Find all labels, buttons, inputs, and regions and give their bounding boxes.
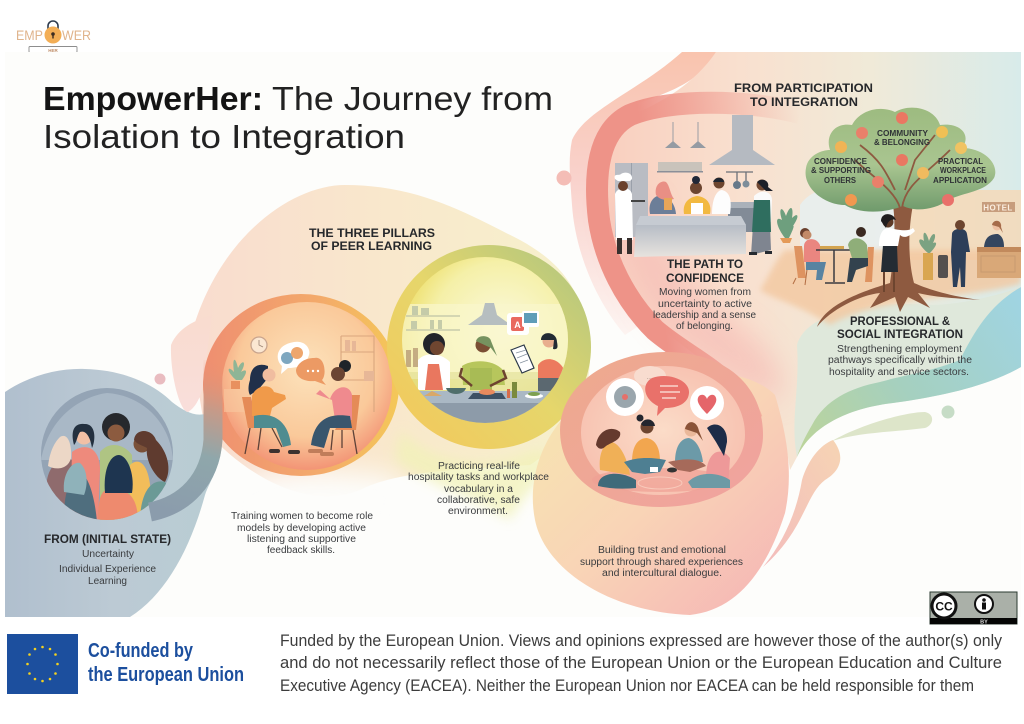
seated woman 3 — [675, 438, 703, 462]
co-funded label — [88, 640, 244, 686]
text: practicing hospitality tasks: collaborative, safe — [437, 495, 520, 506]
plant — [777, 208, 797, 238]
funding disclaimer: and do not necessarily reflect those of the European Union or the European Education and Culture — [280, 654, 1002, 672]
ribbon: grey-blue ribbon joining first circle — [150, 360, 213, 512]
text: building trust: and intercultural dialogue. — [602, 568, 722, 579]
chef — [615, 188, 633, 240]
infographic panel background — [5, 52, 1021, 617]
text: training role models: models by developing active — [237, 523, 366, 534]
heading: three pillars — [309, 226, 435, 253]
counter — [634, 216, 746, 257]
hotel lobby: HOTEL — [983, 204, 1013, 212]
counter items — [446, 388, 466, 394]
text: practicing hospitality tasks: environment. — [448, 506, 508, 517]
woman with tablet — [538, 359, 565, 390]
tree labels: & SUPPORTING — [811, 166, 871, 175]
text: the path to confidence: CONFIDENCE — [666, 271, 744, 285]
seated woman 2 — [632, 438, 660, 462]
heading: from participation to integration: TO INTEGRATION — [750, 95, 858, 109]
cook at stove — [712, 190, 731, 214]
logo: EmpowerHer — [16, 21, 91, 53]
woman by tree — [881, 245, 898, 272]
hotel lobby — [760, 190, 1021, 325]
text: professional and social integration: hospitality and service sectors. — [829, 367, 969, 378]
funding disclaimer: Executive Agency (EACEA). Neither the European Union nor EACEA can be held responsible for them — [280, 677, 974, 695]
pillar 2: yellow-green ring and kitchen scene — [387, 245, 591, 449]
co-funded label: Co-funded by — [88, 640, 194, 662]
swoosh: pale green blob — [832, 412, 932, 441]
text: practicing hospitality tasks: vocabulary in a — [444, 484, 513, 495]
pale pink drip — [171, 321, 203, 412]
pillar 2: yellow-green ring and kitchen scene: A — [514, 320, 521, 330]
pillar 3: pink ring and discussion circle — [560, 352, 763, 507]
window behind tree — [800, 185, 905, 250]
panel: lower pink blob — [533, 371, 789, 615]
heading: from initial state: Learning — [88, 576, 127, 587]
text: the path to confidence: leadership and a sense — [653, 310, 756, 321]
cook middle — [462, 361, 505, 385]
text: the path to confidence: THE PATH TO — [667, 257, 743, 271]
person left — [242, 397, 254, 428]
heading: from initial state: FROM (INITIAL STATE) — [44, 532, 171, 546]
heading: three pillars: THE THREE PILLARS — [309, 226, 435, 240]
text: professional and social integration — [828, 314, 972, 378]
panel: peach wave behind pillars — [190, 185, 590, 496]
text: training role models — [231, 511, 373, 556]
tree labels: COMMUNITY — [877, 129, 929, 138]
funding disclaimer: Funded by the European Union. Views and opinions expressed are however those of the author(s) only — [280, 632, 1003, 650]
sage ground under roots — [794, 287, 1021, 457]
text: professional and social integration: pathways specifically within the — [828, 355, 972, 366]
panel: initial state portrait — [41, 388, 173, 525]
seated woman 4 — [706, 452, 730, 479]
panel: top right wash — [603, 52, 1021, 470]
CC BY licence badge: BY — [980, 620, 988, 626]
tree labels: OTHERS — [824, 176, 857, 185]
pillar 3: pink ring and discussion circle: ... — [647, 372, 653, 381]
woman in yellow — [684, 196, 710, 214]
title — [43, 80, 553, 155]
woman in hijab — [649, 195, 676, 214]
cook left — [418, 354, 450, 390]
text: training role models: listening and supportive — [247, 534, 356, 545]
tree labels: WORKPLACE — [940, 166, 987, 175]
text: building trust: support through shared experiences — [580, 557, 743, 568]
funding disclaimer — [280, 632, 1003, 695]
text: training role models: Training women to become role — [231, 511, 373, 522]
tree labels: APPLICATION — [933, 176, 987, 185]
text: practicing hospitality tasks — [408, 461, 549, 517]
seated woman 1 — [600, 442, 630, 475]
logo: EmpowerHer: HER — [48, 48, 58, 53]
co-funded label: the European Union — [88, 664, 244, 686]
heading: from participation to integration — [734, 81, 873, 109]
title: EmpowerHer: — [43, 80, 263, 117]
person right — [335, 395, 360, 430]
tree labels: & BELONGING — [874, 138, 930, 147]
tree with fruit canopy — [806, 108, 995, 327]
heading: from initial state: Individual Experience — [59, 564, 156, 575]
floor wash — [760, 250, 1021, 325]
server in green apron — [751, 232, 771, 254]
blush top ribbon — [570, 52, 716, 335]
heading: from initial state — [44, 532, 171, 587]
text: building trust: Building trust and emotional — [598, 545, 726, 556]
text: the path to confidence: of belonging. — [676, 321, 733, 332]
text: training role models: feedback skills. — [267, 545, 335, 556]
apples — [896, 112, 908, 124]
heading: three pillars: OF PEER LEARNING — [311, 239, 432, 253]
swoosh: teal and green — [797, 287, 1021, 457]
trunk — [817, 205, 980, 327]
title: Isolation to Integration — [43, 118, 405, 155]
language bubbles — [507, 313, 529, 335]
kitchen scene: the path to confidence — [615, 115, 797, 257]
text: the path to confidence: uncertainty to active — [658, 299, 752, 310]
swoosh: peach strip — [763, 440, 840, 567]
counter — [420, 391, 550, 423]
text: the path to confidence: Moving women from — [659, 287, 751, 298]
logo: EmpowerHer: EMP — [16, 28, 43, 43]
text: professional and social integration: SOCIAL INTEGRATION — [837, 327, 963, 341]
heading: from initial state: Uncertainty — [82, 549, 134, 560]
canopy — [806, 108, 995, 212]
logo: EmpowerHer: WER — [62, 28, 91, 43]
text: building trust — [580, 545, 743, 579]
pillar 1: orange ring and active-listening scene — [150, 294, 399, 512]
CC BY licence badge: CC — [935, 600, 953, 614]
tree labels: CONFIDENCE — [814, 157, 868, 166]
text: the path to confidence — [653, 257, 756, 332]
text: practicing hospitality tasks: hospitality tasks and workplace — [408, 472, 549, 483]
pink glow inside ribbon — [622, 210, 786, 397]
pendant lamps — [673, 122, 698, 142]
cafe table scene — [793, 227, 874, 285]
CC BY licence badge — [930, 592, 1017, 626]
text: practicing hospitality tasks: Practicing real-life — [438, 461, 520, 472]
EU flag — [7, 634, 78, 694]
extractor hood — [709, 115, 775, 165]
top right ribbon — [597, 103, 800, 420]
heading: from participation to integration: FROM PARTICIPATION — [734, 81, 873, 95]
speech bubbles — [278, 342, 309, 374]
title: The Journey from — [272, 80, 553, 117]
text: professional and social integration: PROFESSIONAL & — [850, 314, 950, 328]
tree labels: PRACTICAL — [938, 157, 983, 166]
panel: initial state blue blob — [5, 369, 222, 617]
text: professional and social integration: Strengthening employment — [837, 344, 962, 355]
tree labels — [811, 129, 987, 185]
